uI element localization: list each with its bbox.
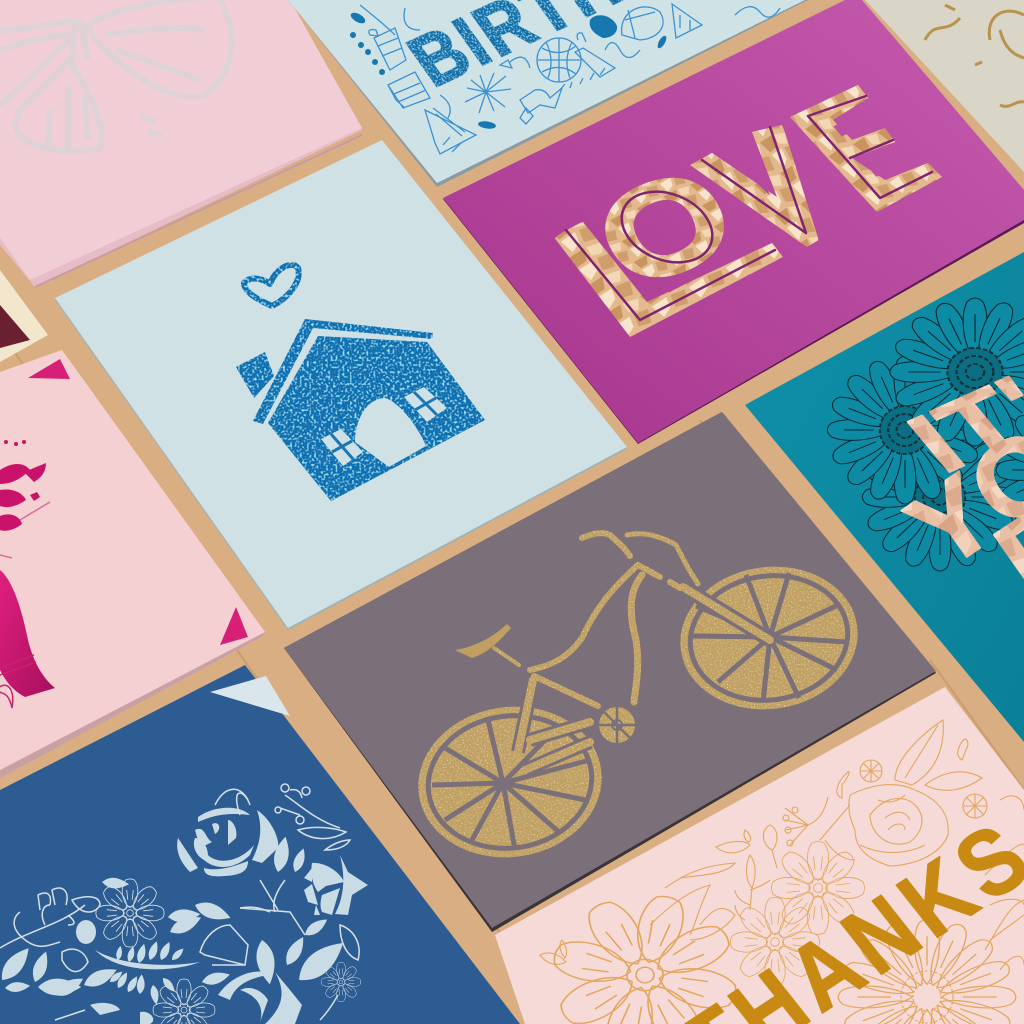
heading: love shard lettering: V: [664, 83, 866, 295]
icon: butterfly cut-out: [0, 0, 232, 151]
panel: pink thanks card: [495, 687, 1024, 1024]
panel: teal flower card: [745, 252, 1024, 742]
heading: love shard lettering: E: [757, 50, 971, 245]
illustration: cut-out floral heart: [0, 808, 368, 1024]
panel: purple love card: [443, 0, 1024, 444]
large flower left: [554, 896, 736, 1024]
silver line flowers and sprigs: [0, 784, 361, 1024]
inner score lines of the letters: [566, 96, 932, 320]
panel: pink butterfly card: [0, 0, 362, 287]
rose: [849, 785, 948, 866]
glitter confetti dots: [349, 11, 668, 130]
panel: pink bouquet card: [0, 350, 265, 778]
central fern: [116, 946, 122, 960]
icon: corner triangle lower: [220, 607, 248, 645]
twine bow: [0, 655, 36, 708]
panel: small cream card at left edge: [0, 270, 48, 362]
bouquet leaves: [0, 440, 46, 531]
icon: gold bicycle cut-out: [408, 533, 867, 869]
frame and handlebars: [494, 533, 770, 770]
panel: pale blue house card: [55, 140, 627, 630]
rose right: [311, 863, 344, 892]
icon: glitter house: [236, 319, 485, 501]
gold wheels and tubes: [408, 555, 867, 869]
sprigs: [785, 797, 828, 845]
panel: blue heart card: [0, 665, 520, 1024]
icon: bouquet vase: [0, 570, 55, 697]
large daisy right: [838, 919, 1016, 1024]
panel: beige card top right: [865, 0, 1024, 172]
small flower clusters: [772, 842, 864, 934]
heading: love shard lettering: [554, 85, 942, 337]
saddle: [455, 624, 511, 658]
panel: light blue birthday card: [288, 0, 808, 187]
window panes: [331, 392, 437, 459]
panel: grey bicycle card: [284, 412, 936, 932]
heading: love shard lettering: L: [521, 122, 813, 381]
corner slot: [210, 676, 290, 716]
gold swirl decorations: [925, 5, 1024, 106]
illustration: line art daisies: [827, 298, 1024, 571]
icon: glitter heart: [244, 265, 299, 306]
doodles: party icons: [360, 4, 780, 154]
heading: love shard lettering: O: [579, 145, 751, 310]
wheel rims and spokes: [420, 566, 856, 859]
rose top: [198, 808, 250, 822]
illustration: orange line art flowers: [531, 720, 1024, 1024]
icon: corner triangles: [28, 359, 70, 379]
top leaf and small flowers: [895, 720, 943, 785]
lower rose: [218, 972, 268, 1000]
